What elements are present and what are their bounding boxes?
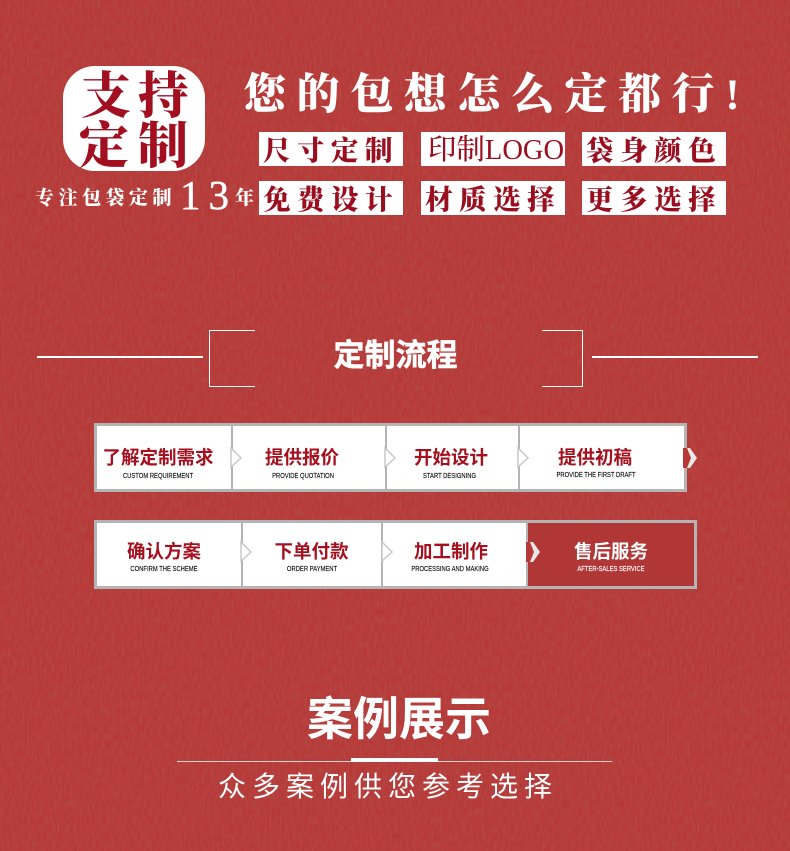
step: 确认方案: 确认方案 (127, 541, 201, 562)
step: 提供初稿 (520, 426, 684, 489)
tag: 材质选择: 材质选择 (425, 184, 561, 215)
main headline: 您的包想怎么定都行! (243, 72, 750, 119)
tag: 免费设计: 免费设计 (263, 184, 399, 215)
step: 售后服务 (528, 523, 694, 586)
step: 开始设计: START DESIGNING (423, 471, 476, 480)
section header: 定制流程 (37, 330, 758, 387)
step: 提供初稿: 提供初稿 (558, 447, 632, 468)
tagline suffix: 年 (235, 188, 254, 209)
arrows row 2 (240, 540, 540, 562)
step: 下单付款: 下单付款 (274, 541, 348, 562)
step: 开始设计 (387, 426, 518, 489)
step: 加工制作 (383, 523, 526, 586)
step: 提供报价: 提供报价 (265, 447, 339, 468)
arrows row 1 (230, 446, 697, 468)
divider with accent bar (177, 758, 612, 762)
badge text line 1: 支持 (81, 68, 195, 124)
section title text: 定制流程 (334, 338, 458, 373)
step: 开始设计: 开始设计 (414, 447, 488, 468)
step: 了解定制需求 (97, 426, 231, 489)
step: 下单付款 (243, 523, 381, 586)
tag: 更多选择: 更多选择 (586, 184, 722, 215)
process row 1 (94, 423, 687, 492)
badge: 支持定制 (63, 66, 205, 171)
step: 下单付款: ORDER PAYMENT (287, 564, 337, 573)
step: 提供报价: PROVIDE QUOTATION (272, 471, 334, 480)
step: 提供报价 (233, 426, 385, 489)
step: 确认方案 (97, 523, 241, 586)
step: 加工制作: 加工制作 (414, 541, 488, 562)
badge text line 2: 定制 (79, 118, 197, 174)
step: 了解定制需求: 了解定制需求 (102, 447, 214, 468)
tagline text: 专注包袋定制 (35, 188, 176, 209)
tagline: 专注包袋定制13年 (35, 172, 254, 218)
step: 确认方案: CONFIRM THE SCHEME (130, 564, 198, 573)
step: 提供初稿: PROVIDE THE FIRST DRAFT (556, 470, 636, 479)
step: 加工制作: PROCESSING AND MAKING (411, 564, 489, 573)
step: 售后服务: AFTER-SALES SERVICE (577, 564, 645, 573)
tag: 尺寸定制: 尺寸定制 (263, 135, 399, 166)
step: 售后服务: 售后服务 (574, 541, 648, 562)
step: 了解定制需求: CUSTOM REQUIREMENT (123, 471, 193, 480)
tag: 袋身颜色: 袋身颜色 (586, 135, 722, 166)
process row 2 (94, 520, 697, 589)
section heading: 案例展示: 案例展示 (307, 693, 491, 745)
tag: 印制LOGO: 印制LOGO (428, 135, 564, 166)
number 13: 13 (180, 172, 237, 218)
subtitle: 众多案例供您参考选择: 众多案例供您参考选择 (218, 771, 558, 802)
